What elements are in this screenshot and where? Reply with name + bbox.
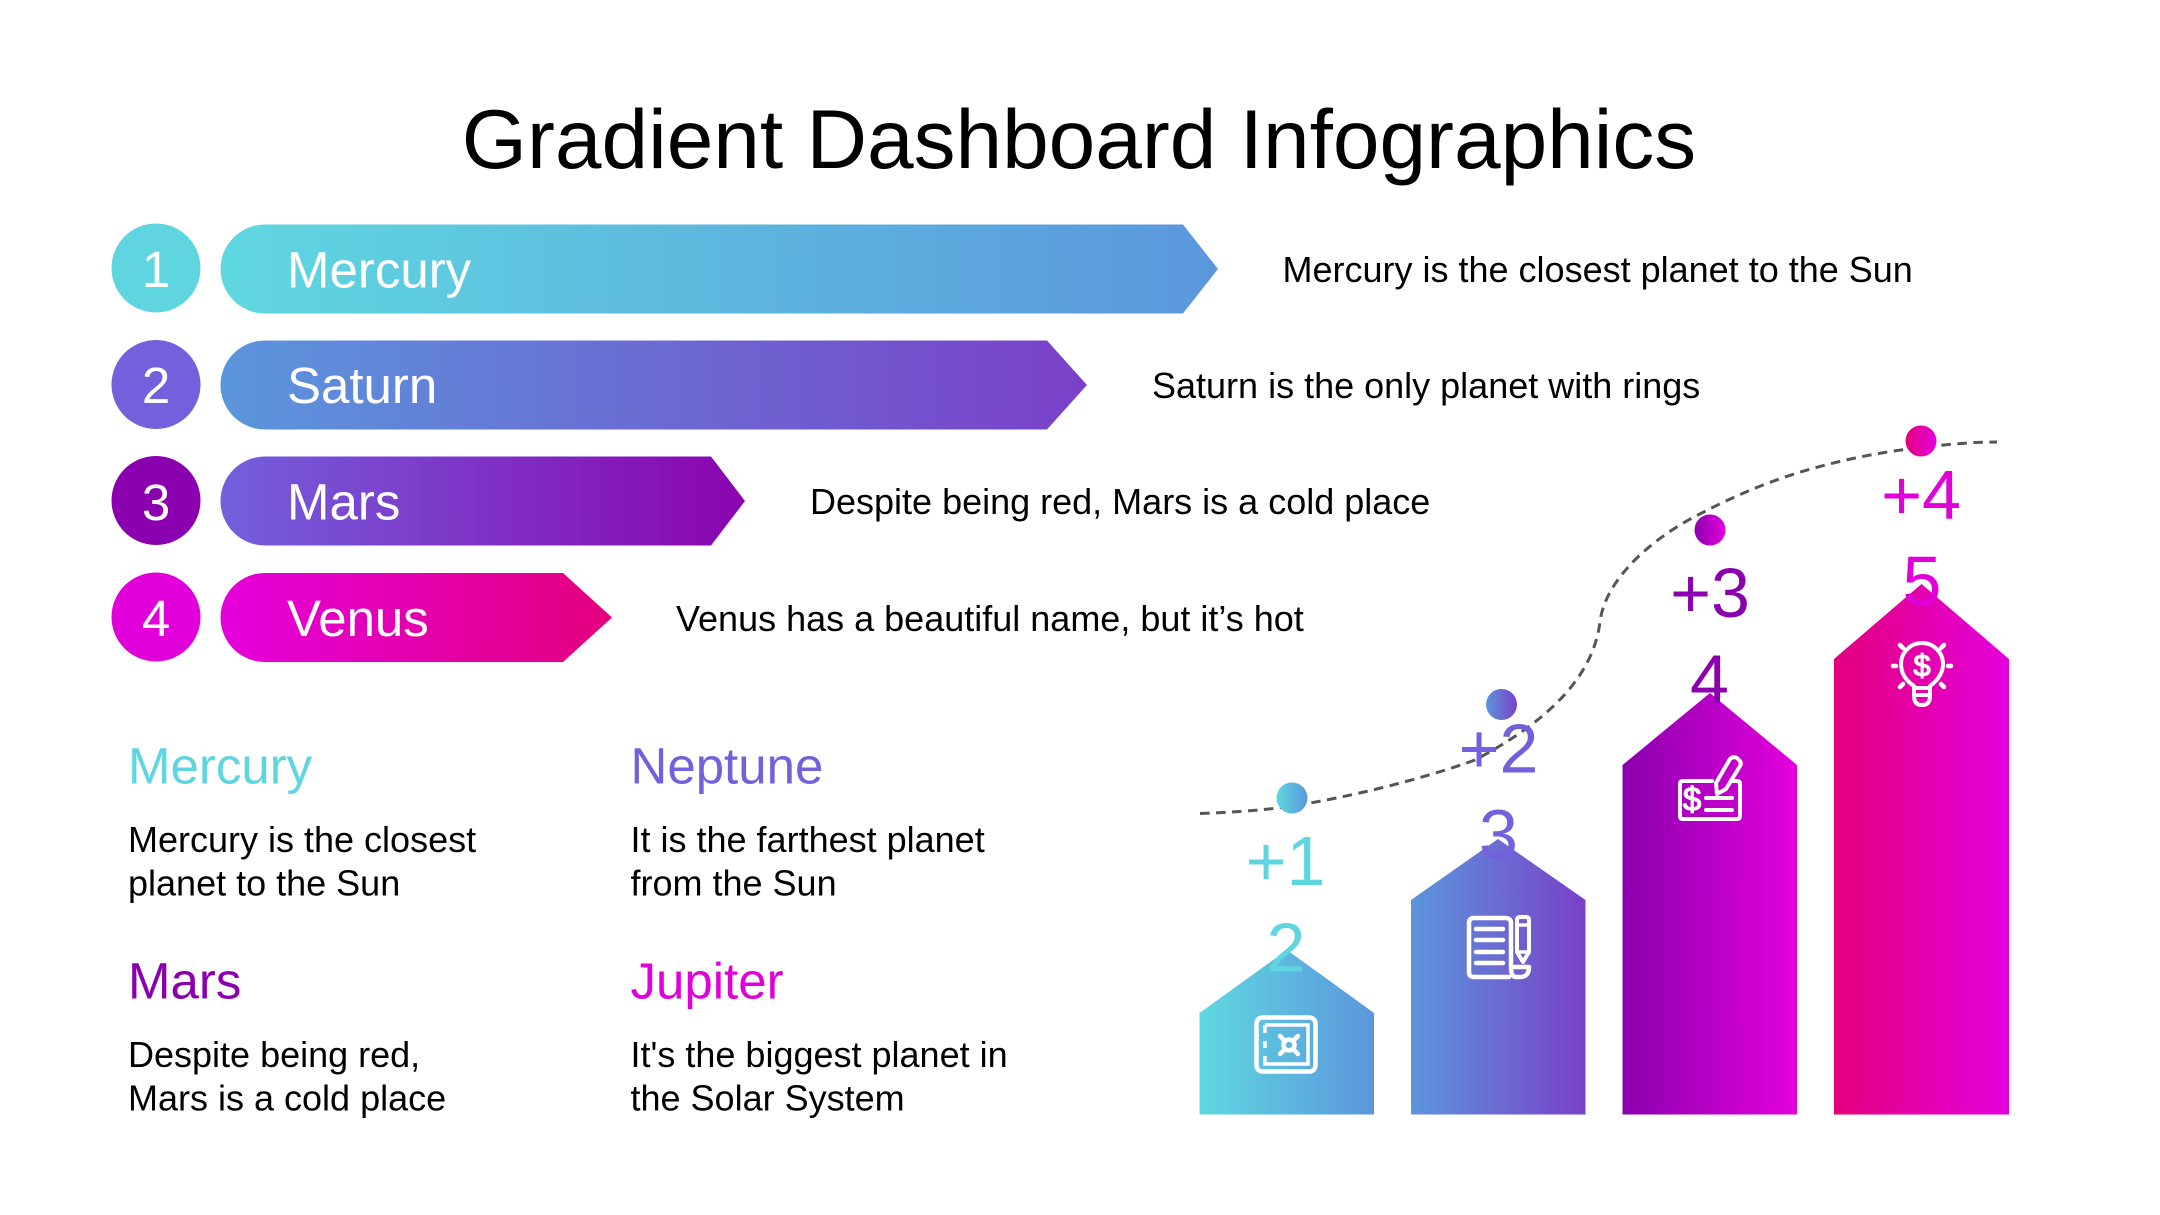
arrow bar: Mercury: Mercury	[287, 242, 472, 298]
value +4: +4	[1881, 456, 1961, 534]
icon: light bulb with dollar	[1893, 643, 1951, 705]
number badge 3: 3	[142, 474, 170, 531]
icon: document and pencil	[1469, 917, 1529, 977]
bar number 4: 4	[1690, 640, 1729, 718]
text block: Mars: Mars	[128, 952, 241, 1010]
number badge 2	[112, 340, 200, 429]
icon: safe	[1256, 1018, 1316, 1072]
trend dot 2	[1486, 689, 1517, 720]
bar shape 1	[1200, 950, 1374, 1114]
text block: Mercury: Mercury	[128, 738, 313, 794]
arrow bar: Mars	[220, 456, 745, 546]
value +1: +1	[1246, 822, 1325, 900]
bar shape 2	[1411, 839, 1586, 1114]
bar 4	[1834, 426, 2009, 1114]
number badge 4	[112, 572, 200, 662]
arrow bar: Mars: Mars	[287, 474, 400, 530]
ranking row 2: Saturn	[112, 340, 1700, 430]
trend dot 3	[1694, 514, 1726, 546]
description: Mercury: Mercury is the closest planet to the Sun	[1282, 249, 1913, 290]
text block: Mars: Mars is a cold place	[128, 1078, 446, 1118]
text block: Jupiter	[630, 952, 1008, 1118]
trend dot 1	[1276, 782, 1308, 814]
dollar sign: $	[1913, 648, 1931, 683]
trend dot 4	[1906, 426, 1936, 456]
text block: Mercury: Mercury is the closest	[128, 819, 476, 860]
value +3: +3	[1670, 554, 1750, 632]
icon: cheque and pencil	[1680, 757, 1741, 819]
arrow bar: Venus: Venus	[287, 590, 429, 647]
bar number 2: 2	[1267, 908, 1305, 986]
number badge 1: 1	[142, 241, 170, 298]
arrow bar: Saturn: Saturn	[287, 357, 437, 414]
text block: Mercury: planet to the Sun	[128, 862, 400, 904]
bar shape 3	[1622, 693, 1797, 1114]
ranking row 1: Mercury	[112, 224, 1913, 314]
bar number 3: 3	[1479, 796, 1518, 874]
text block: Neptune: from the Sun	[630, 862, 837, 904]
text block: Jupiter: Jupiter	[630, 952, 784, 1010]
arrow bar: Venus	[220, 573, 612, 662]
number badge 3	[112, 456, 200, 545]
description: Venus: Venus has a beautiful name, but it’s hot	[676, 598, 1304, 639]
bar 1	[1200, 782, 1374, 1114]
number badge 4: 4	[142, 590, 170, 647]
dashed trend curve	[1200, 442, 1997, 814]
text block: Mercury	[128, 738, 476, 904]
dollar sign: $	[1683, 780, 1701, 818]
ranking row 4: Venus	[112, 572, 1304, 662]
ranking row 3: Mars	[112, 456, 1430, 546]
text block: Jupiter: It's the biggest planet in	[630, 1034, 1008, 1075]
number badge 2: 2	[142, 357, 170, 414]
value +2: +2	[1459, 710, 1538, 788]
bar 2	[1411, 689, 1586, 1114]
arrow bar: Mercury	[220, 224, 1218, 314]
text block: Mars	[128, 952, 446, 1118]
bar 3	[1622, 514, 1797, 1114]
number badge 1	[112, 224, 200, 312]
description: Mars: Despite being red, Mars is a cold place	[810, 481, 1430, 522]
description: Saturn: Saturn is the only planet with rings	[1152, 365, 1700, 406]
text block: Neptune: Neptune	[630, 738, 823, 794]
arrow bar: Saturn	[220, 340, 1087, 430]
text block: Jupiter: the Solar System	[630, 1078, 905, 1118]
bar number 5: 5	[1903, 542, 1941, 620]
text block: Mars: Despite being red,	[128, 1034, 420, 1075]
text block: Neptune	[630, 738, 985, 904]
bar shape 4	[1834, 584, 2009, 1114]
title: Gradient Dashboard Infographics	[462, 92, 1696, 186]
text block: Neptune: It is the farthest planet	[630, 819, 985, 860]
